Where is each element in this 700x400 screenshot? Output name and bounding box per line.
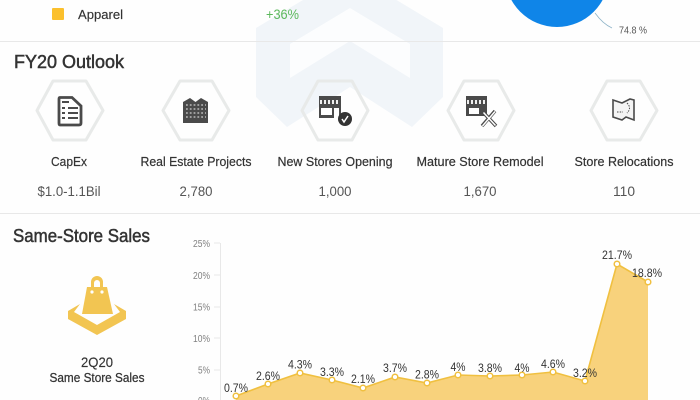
line (236, 264, 648, 396)
icon: map (613, 99, 634, 120)
y axis: 15% (193, 302, 210, 314)
outlook item: Mature Store Remodel (416, 81, 544, 199)
y axis: 25% (193, 239, 210, 250)
outlook item: New Stores Opening: 1,000 (318, 184, 352, 199)
outlook item: CapEx: CapEx (51, 154, 87, 169)
data points (233, 261, 651, 399)
data labels: 0.7% (224, 381, 248, 395)
data labels: 4% (450, 360, 466, 374)
outlook item: Mature Store Remodel: Mature Store Remodel (416, 154, 544, 169)
legend row: apparel: +36% (266, 7, 299, 22)
outlook item: Mature Store Remodel: 1,670 (464, 184, 496, 199)
icon: building (183, 98, 208, 123)
label: 2Q20 Same Store Sales: Same Store Sales (50, 370, 145, 385)
watermark logo (256, 0, 443, 127)
data labels: 2.1% (351, 372, 375, 386)
data labels: 3.7% (383, 361, 407, 375)
pie chart fragment (505, 0, 647, 36)
data labels: 2.8% (415, 368, 439, 382)
data labels: 4.3% (288, 358, 312, 372)
y axis: 5% (198, 366, 210, 376)
outlook item: New Stores Opening (278, 81, 392, 199)
data labels: 2.6% (256, 369, 280, 383)
pie chart fragment: 74.8 % (619, 24, 647, 36)
data labels (224, 248, 662, 395)
outlook item: Real Estate Projects: Real Estate Projects (140, 154, 252, 169)
outlook item: CapEx: $1.0-1.1Bil (38, 184, 100, 199)
data labels: 21.7% (602, 248, 632, 262)
outlook item: Real Estate Projects (140, 81, 252, 199)
outlook item: Real Estate Projects: 2,780 (180, 184, 212, 199)
icon: store with check (319, 96, 352, 126)
icon: shopping bag on tray (68, 276, 126, 335)
data labels: 18.8% (632, 266, 662, 280)
data labels: 4% (514, 361, 530, 375)
legend row: apparel (52, 7, 299, 22)
data labels: 3.3% (320, 365, 344, 379)
outlook item: New Stores Opening: New Stores Opening (278, 154, 392, 169)
heading: Same-Store Sales: Same-Store Sales (13, 225, 150, 246)
label: 2Q20 Same Store Sales: 2Q20 (81, 354, 113, 370)
outlook item: Store Relocations: Store Relocations (574, 154, 674, 169)
data labels: 4.6% (541, 357, 565, 371)
data labels: 3.8% (478, 361, 502, 375)
icon: store with tools (466, 96, 496, 126)
heading: FY20 Outlook: FY20 Outlook (14, 51, 125, 72)
legend row: apparel: Apparel (78, 7, 123, 22)
data labels: 3.2% (573, 366, 597, 380)
y axis: 10% (193, 334, 210, 345)
area fill (236, 264, 648, 400)
outlook item: Store Relocations (574, 81, 674, 199)
y axis (193, 239, 220, 400)
outlook item: Store Relocations: 110 (613, 184, 635, 199)
icon: document (59, 98, 81, 125)
outlook item: CapEx (37, 81, 103, 199)
area chart: same-store sales (193, 239, 662, 400)
label: 2Q20 Same Store Sales (50, 354, 145, 385)
y axis: 20% (193, 271, 210, 282)
